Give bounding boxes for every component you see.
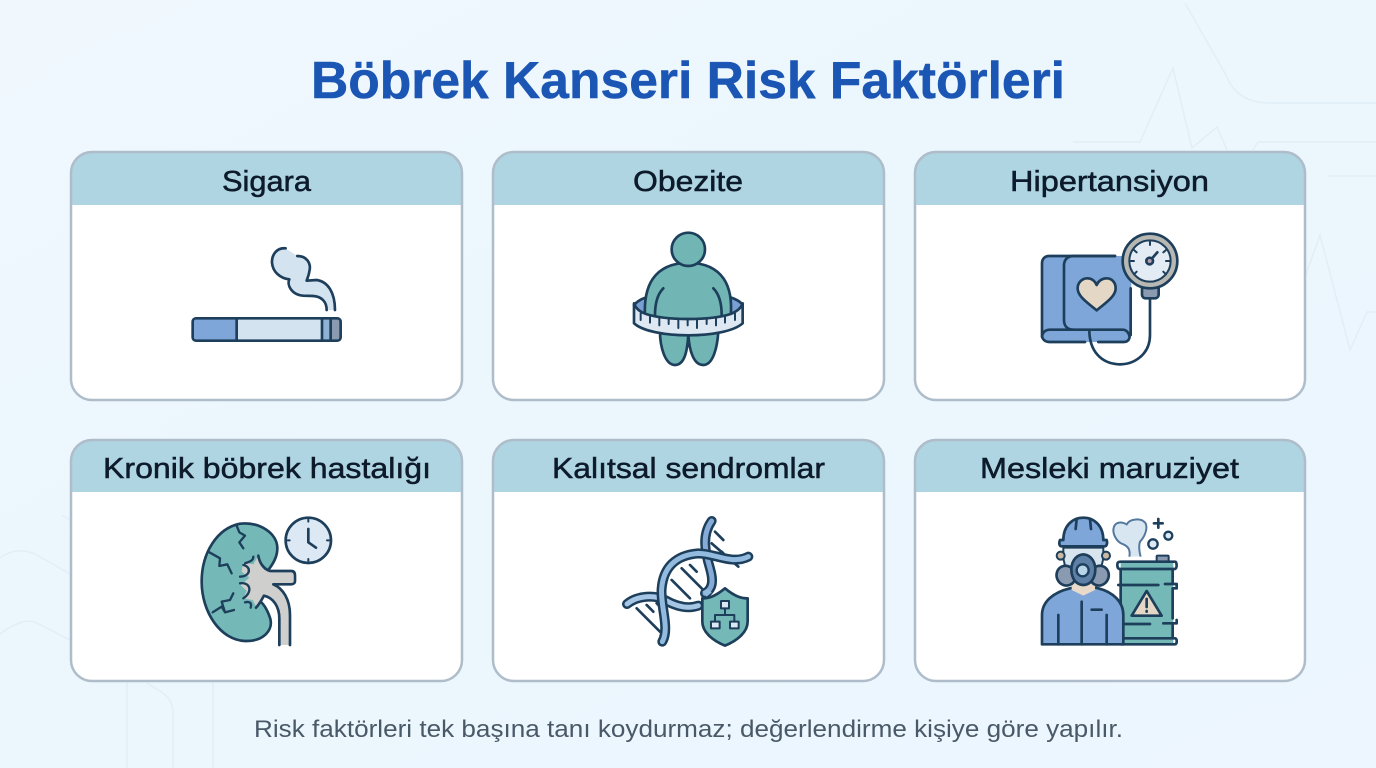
icon: damaged kidney and clock <box>202 518 331 645</box>
footnote: Risk faktörleri tek başına tanı koydurmaz; değerlendirme kişiye göre yapılır. <box>254 716 1123 743</box>
panel: Hipertansiyon <box>915 152 1305 400</box>
heading: Sigara: Sigara <box>222 166 312 198</box>
panel: Sigara <box>71 152 462 400</box>
icon: DNA helix and shield <box>627 521 748 646</box>
heading: Mesleki maruziyet: Mesleki maruziyet <box>980 453 1239 485</box>
heading: Kalıtsal sendromlar: Kalıtsal sendromlar <box>552 453 825 485</box>
icon: body with measuring tape <box>634 233 743 365</box>
heading: Hipertansiyon: Hipertansiyon <box>1010 166 1209 198</box>
panel: Mesleki maruziyet <box>915 440 1305 681</box>
icon: cigarette <box>193 248 341 341</box>
title: Böbrek Kanseri Risk Faktörleri <box>311 52 1065 110</box>
icon: blood pressure cuff <box>1042 234 1177 364</box>
panel: Kronik böbrek hastalığı <box>71 440 462 681</box>
heading: Kronik böbrek hastalığı: Kronik böbrek hastalığı <box>103 453 431 485</box>
panel: Obezite <box>493 152 884 400</box>
icon: worker with respirator and hazardous barrel <box>1042 518 1177 644</box>
panel: Kalıtsal sendromlar <box>493 440 884 681</box>
heading: Obezite: Obezite <box>633 166 743 198</box>
